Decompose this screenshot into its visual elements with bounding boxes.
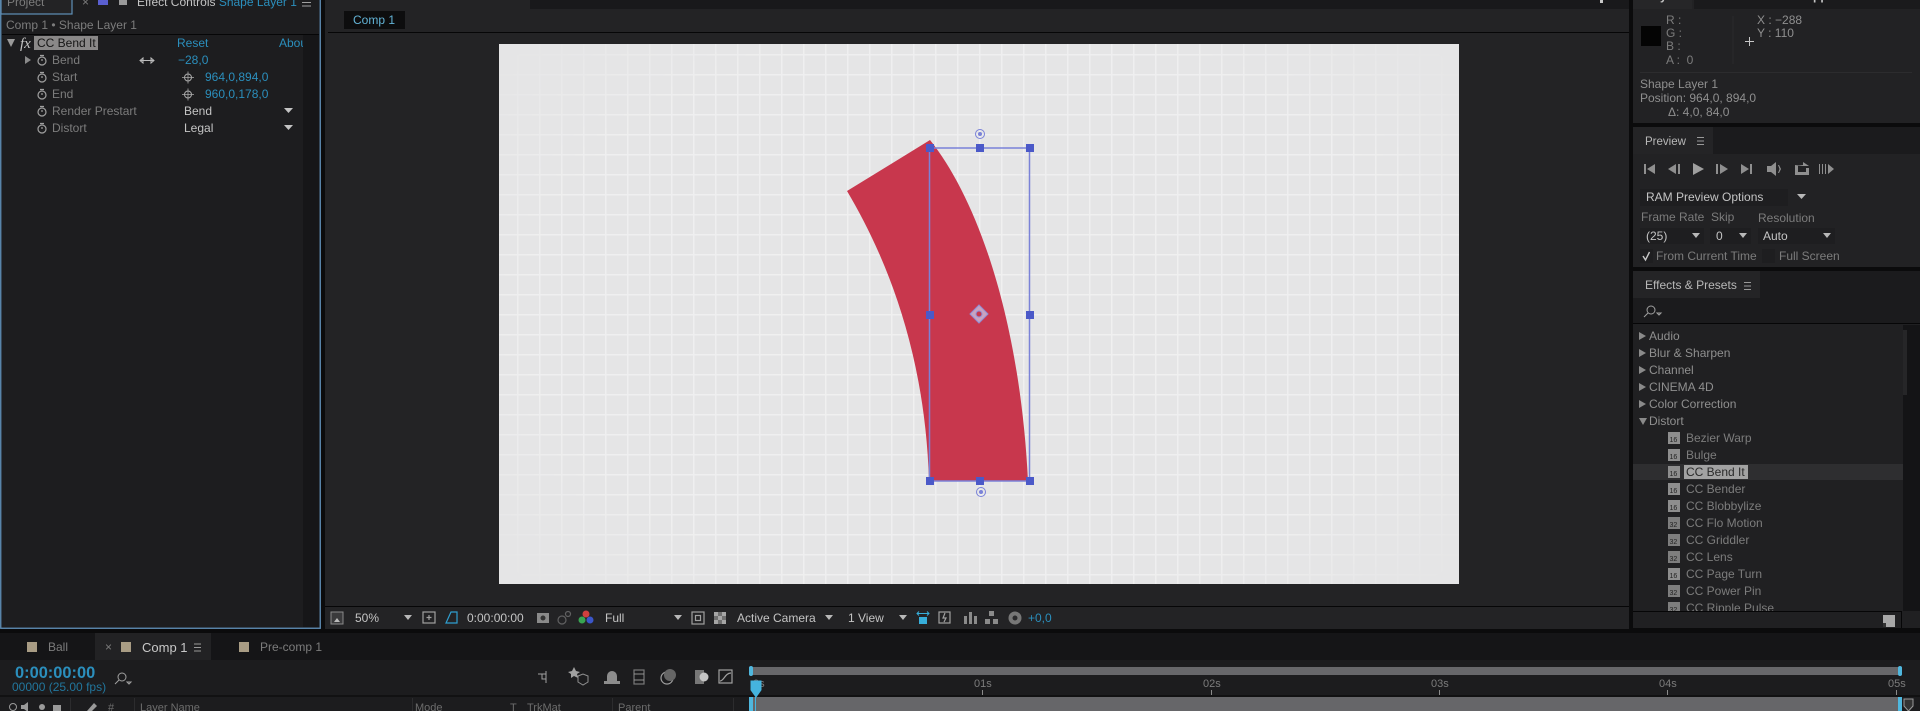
effect rows: CC Ripple Pulse (1686, 601, 1774, 615)
time ruler: 05s (1888, 678, 1906, 690)
timecode (12, 664, 106, 694)
rgba readout: B : (1666, 39, 1681, 53)
rgba readout: G : (1666, 26, 1682, 40)
scrollbar (1903, 325, 1920, 611)
dropdown: resolution (1758, 228, 1835, 244)
category rows: CINEMA 4D (1649, 380, 1714, 394)
property: render prestart: Bend (184, 104, 212, 118)
effect rows: CC Blobbylize (1686, 499, 1762, 513)
icon: mini flowchart (538, 671, 546, 683)
icon: frame blending (634, 670, 644, 684)
breadcrumb: Comp 1 • Shape Layer 1 (6, 18, 137, 32)
field labels: Resolution (1758, 211, 1815, 225)
property: bend: −28,0 (178, 53, 209, 67)
effect rows: 32 (1670, 556, 1677, 563)
panel: effects and presets (1633, 271, 1920, 628)
layer column headers (10, 698, 734, 711)
tab: project (1, 0, 72, 14)
tab: ball (27, 640, 68, 654)
icon: snapshot (537, 613, 549, 623)
category rows: Color Correction (1649, 397, 1736, 411)
clipped tab titles (1660, 0, 1828, 3)
icon: region of interest (692, 612, 704, 624)
icon: timeline panel (964, 612, 977, 624)
viewer toolbar: Active Camera (737, 611, 816, 625)
effect rows: CC Power Pin (1686, 584, 1761, 598)
tab title: effects and presets: Effects & Presets (1645, 278, 1737, 292)
layer position readout: Δ: 4,0, 84,0 (1668, 105, 1730, 119)
dropdown: ram preview options: RAM Preview Options (1646, 190, 1763, 204)
property: render prestart: Render Prestart (52, 104, 137, 118)
dropdown: frame rate (1640, 228, 1704, 244)
effect header: cc bend it: Reset (177, 36, 209, 50)
property: bend (25, 53, 209, 67)
composition canvas (499, 44, 1459, 584)
viewer toolbar: 1 View (848, 611, 884, 625)
category rows: Distort (1649, 414, 1684, 428)
effect rows: 16 (1670, 471, 1677, 478)
rgba readout: R : (1666, 13, 1681, 27)
timeline navigator (749, 666, 1902, 676)
effect rows: Bulge (1686, 448, 1717, 462)
effect rows: CC Lens (1686, 550, 1733, 564)
property: start: 964,0,894,0 (205, 70, 269, 84)
property: distort: Legal (184, 121, 213, 135)
tab: pre-comp 1: Pre-comp 1 (260, 640, 322, 654)
icon: previous frame (1668, 164, 1680, 174)
effect rows: 16 (1670, 505, 1677, 512)
viewer toolbar: 0:00:00:00 (467, 611, 524, 625)
effect rows: 32 (1670, 607, 1677, 614)
viewer toolbar (331, 610, 1052, 625)
colour swatch (1641, 26, 1661, 46)
icon: panel menu (302, 2, 311, 6)
dropdown: frame rate: (25) (1646, 229, 1667, 243)
layer position readout: Shape Layer 1 (1640, 77, 1718, 91)
effect rows: CC Bend It (1686, 465, 1745, 479)
transport controls (1644, 162, 1834, 176)
property: start: Start (52, 70, 78, 84)
playhead (751, 681, 761, 711)
icon: flash (939, 612, 950, 623)
highlighted row (1633, 464, 1903, 480)
viewer toolbar: Full (605, 611, 624, 625)
effect rows: 32 (1670, 539, 1677, 546)
panel: info (1633, 0, 1920, 123)
effect rows (1668, 431, 1774, 615)
bent red shape (847, 140, 1028, 481)
xy readout (1745, 13, 1802, 46)
time ruler: 04s (1659, 678, 1677, 690)
tab: comp 1 active: × (105, 640, 112, 654)
tab: comp 1 (344, 11, 405, 29)
panel: preview (1633, 127, 1920, 267)
icon: magnification (331, 612, 343, 624)
icon: first frame (1644, 164, 1655, 174)
property: start (38, 70, 269, 84)
effect rows: 16 (1670, 454, 1677, 461)
viewer toolbar: 50% (355, 611, 379, 625)
dropdown: resolution: Auto (1763, 229, 1788, 243)
effect rows: 32 (1670, 522, 1677, 529)
time ruler: 02s (1203, 678, 1221, 690)
field labels: Skip (1711, 210, 1735, 224)
icon: new bin (1883, 615, 1895, 627)
effect header: cc bend it (7, 36, 303, 51)
property: distort: Distort (52, 121, 87, 135)
effect rows: CC Flo Motion (1686, 516, 1763, 530)
icon: loop (1795, 162, 1809, 175)
property: distort (38, 121, 293, 135)
icon: graph editor (719, 670, 732, 683)
dropdown: skip (1710, 228, 1751, 244)
layer position readout (1640, 77, 1756, 119)
xy readout: Y : 110 (1757, 26, 1794, 40)
rgba readout (1666, 13, 1694, 67)
checkbox: from current time: From Current Time (1656, 249, 1757, 263)
effect header: cc bend it: fx (20, 36, 31, 52)
icon: play (1693, 163, 1704, 175)
effect rows: CC Griddler (1686, 533, 1749, 547)
property: end (38, 87, 269, 101)
icon: shy layers (604, 671, 620, 684)
time ruler: 01s (974, 678, 992, 690)
time ruler: 03s (1431, 678, 1449, 690)
property: end: End (52, 87, 73, 101)
icon: transparency grid (714, 612, 726, 624)
property: bend: Bend (52, 53, 80, 67)
icon: panel menu (1744, 282, 1751, 290)
effect header: cc bend it: CC Bend It (37, 36, 96, 50)
panel: composition viewer (325, 0, 1629, 629)
panel: effect controls (0, 0, 321, 629)
timeline switches (538, 667, 732, 685)
icon: lock (119, 0, 127, 5)
icon: effect swatch (98, 0, 108, 5)
icon: motion blur (661, 669, 676, 684)
panel: timeline (0, 633, 1920, 711)
timecode: 00000 (25.00 fps) (12, 680, 106, 694)
search box (1633, 298, 1920, 323)
timecode: 0:00:00:00 (15, 664, 95, 682)
category rows (1639, 329, 1736, 428)
icon: exposure (1008, 612, 1022, 624)
icon: show snapshot (558, 612, 570, 624)
icon: audio (1767, 162, 1781, 176)
category rows: Audio (1649, 329, 1680, 343)
effect rows: 16 (1670, 573, 1677, 580)
effect rows: 16 (1670, 437, 1677, 444)
effect rows: 16 (1670, 488, 1677, 495)
icon: ram preview (1819, 164, 1834, 174)
field labels: Frame Rate (1641, 210, 1705, 224)
icon: last frame (1741, 164, 1752, 174)
icon: rgb channels (578, 610, 594, 624)
icon: fast previews (917, 612, 929, 624)
tab title: preview: Preview (1645, 136, 1687, 148)
tab: comp 1 active: Comp 1 (142, 640, 188, 655)
icon: flowchart (985, 611, 998, 624)
property: end: 960,0,178,0 (205, 87, 269, 101)
icon: panel menu (1697, 138, 1704, 144)
time ruler: 0s (753, 678, 765, 690)
rgba readout: A : 0 (1666, 53, 1694, 67)
effect rows: CC Bender (1686, 482, 1745, 496)
effect header: cc bend it: About... (279, 36, 320, 50)
dropdown: ram preview options (1640, 189, 1806, 206)
time ruler (753, 678, 1906, 695)
viewer toolbar: +0,0 (1028, 611, 1052, 625)
dropdown: skip: 0 (1716, 229, 1723, 243)
layer position readout: Position: 964,0, 894,0 (1640, 91, 1756, 105)
icon: mask toggle (446, 612, 457, 623)
tab: comp 1: Comp 1 (353, 13, 395, 27)
tab: ball: Ball (48, 640, 68, 654)
icon: timeline search (115, 673, 131, 684)
checkbox: full screen: Full Screen (1779, 249, 1840, 263)
effect rows: CC Page Turn (1686, 567, 1762, 581)
effect rows: Bezier Warp (1686, 431, 1752, 445)
category rows: Channel (1649, 363, 1694, 377)
icon: resolution grid (423, 612, 435, 623)
selection box with handles (926, 130, 1034, 496)
category rows: Blur & Sharpen (1649, 346, 1730, 360)
clipped toolbar glyph (1600, 0, 1603, 3)
property: render prestart (38, 104, 293, 118)
field labels (1641, 210, 1815, 225)
tab: comp 1 active (95, 633, 211, 660)
effects list (1639, 329, 1774, 615)
icon: next frame (1716, 164, 1728, 174)
work area bar (749, 697, 1913, 711)
effect rows: 32 (1670, 590, 1677, 597)
xy readout: X : −288 (1757, 13, 1802, 27)
icon: draft 3d (568, 667, 588, 685)
icon: brainstorm (695, 670, 708, 684)
